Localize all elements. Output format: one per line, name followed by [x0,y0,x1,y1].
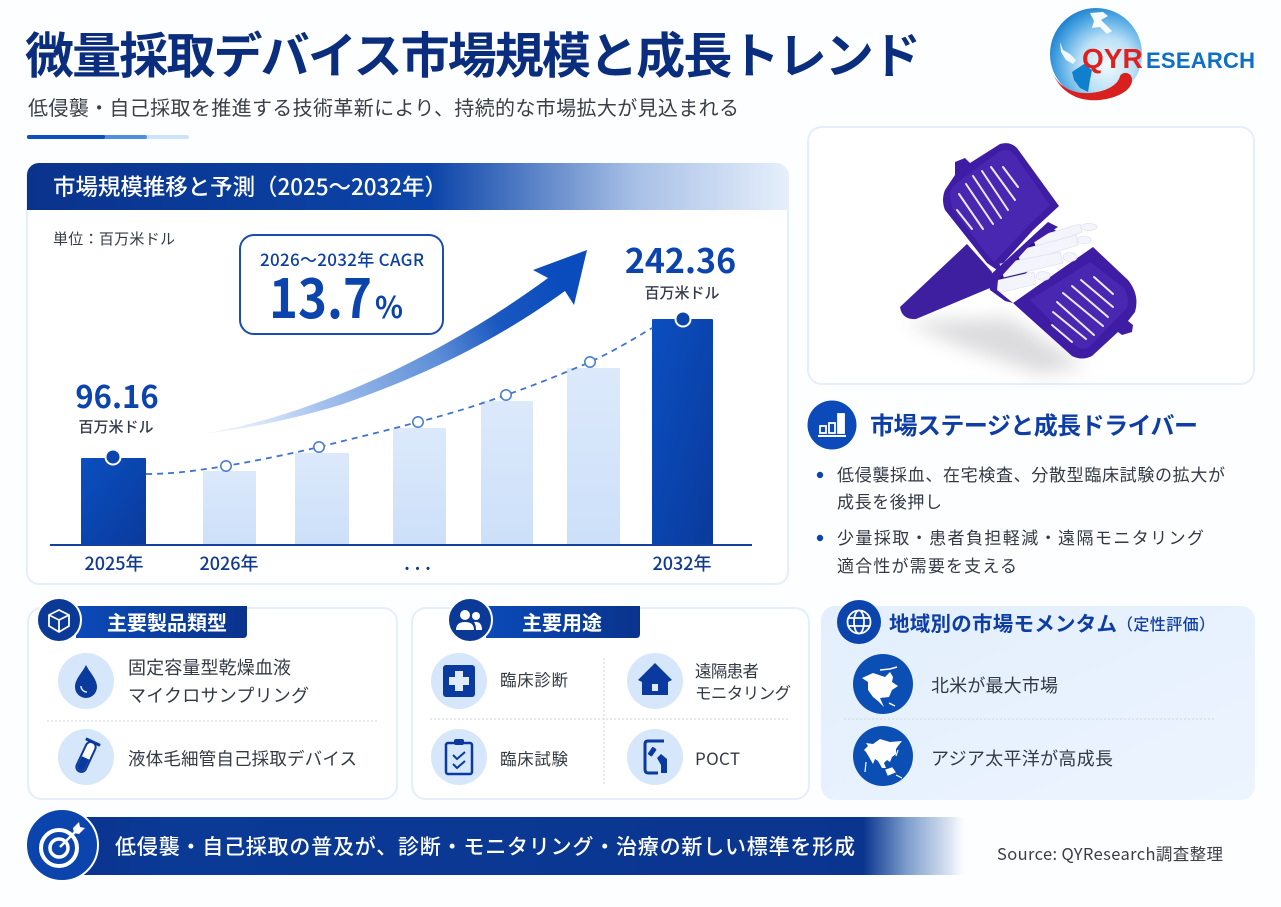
axis line [50,544,752,546]
axis labels: 2025年 [84,550,144,576]
growth arrow [202,250,587,434]
axis labels: 2026年 [199,550,259,576]
bar 2029 [481,401,533,545]
CAGR callout: 2026～2032年 CAGR [260,246,424,271]
item: clinical trials [431,729,568,785]
trend markers [106,312,690,471]
item: dried blood: マイクロサンプリング [128,682,309,708]
device lower lid [1013,247,1136,358]
CAGR callout [240,235,443,334]
logo: QYResearch [1050,8,1255,100]
bar chart [50,312,752,545]
item: dried blood: 固定容量型乾燥血液 [128,654,291,680]
title accent bar [27,135,189,139]
source note: Source: QYResearch調査整理 [997,841,1223,865]
subtitle: 低侵襲・自己採取を推進する技術革新により、持続的な市場拡大が見込まれる [28,92,739,121]
driver bullet 1 [817,461,1225,513]
device hinge [988,222,1058,303]
trend line [146,328,652,474]
driver bullet 2: 少量採取・患者負担軽減・遠隔モニタリング [837,524,1204,549]
icon: phone and tool [627,729,683,785]
panel: product types [28,598,397,799]
icon: bar chart [808,400,856,450]
CAGR callout: 13.7 [269,255,372,334]
icon: users [448,598,492,642]
logo wordmark [1082,43,1255,74]
bar 2028 [393,428,446,545]
icon: box [37,598,81,642]
item: clinical diagnosis: 臨床診断 [500,667,568,691]
icon: medical cross [431,653,487,709]
section: market stage and drivers [808,400,1225,577]
item: dried blood [58,653,309,709]
footer banner [26,809,970,881]
driver bullet 2: 適合性が需要を支える [837,552,1017,577]
icon: target [26,809,98,881]
regional heading: 地域別の市場モメンタム [889,607,1117,637]
item: POCT [627,729,740,785]
icon: clipboard [431,729,487,785]
item: Asia Pacific: アジア太平洋が高成長 [931,745,1113,771]
value 2025 [75,372,159,437]
regional heading [889,607,1215,637]
logo wordmark: QYR [1082,43,1143,74]
axis labels [84,550,712,576]
applications tab [486,606,640,638]
device inner gap [992,226,1058,290]
driver bullet 1: 低侵襲採血、在宅検査、分散型臨床試験の拡大が [837,461,1225,486]
chart header: 市場規模推移と予測（2025～2032年） [53,170,447,202]
icon: home [627,653,683,709]
applications tab: 主要用途 [522,607,602,636]
item: capillary device [58,729,357,785]
product shadow [905,318,1085,374]
icon: Asia map [853,726,913,786]
title: 微量採取デバイス市場規模と成長トレンド [25,17,921,88]
logo wordmark: ESEARCH [1146,48,1255,73]
icon: blood drop [58,653,114,709]
item: capillary device: 液体毛細管自己採取デバイス [128,746,357,771]
CAGR callout: % [375,283,403,327]
drivers heading: 市場ステージと成長ドライバー [870,406,1198,441]
bar 2025 [81,458,146,545]
panel: main applications [412,598,809,799]
panel: market size chart [27,163,788,584]
item: North America: 北米が最大市場 [931,672,1058,698]
axis labels: ... [404,550,436,575]
regional heading: （定性評価） [1117,611,1215,635]
footer banner: 低侵襲・自己採取の普及が、診断・モニタリング・治療の新しい標準を形成 [115,831,855,861]
item: clinical diagnosis [431,653,568,709]
value 2032: 242.36 [625,234,736,283]
panel: product image [808,127,1254,384]
item: North America [853,654,1058,714]
value 2025: 百万米ドル [78,416,154,437]
product types tab: 主要製品類型 [107,607,227,636]
item: remote monitoring: モニタリング [695,680,791,704]
product types tab [76,606,247,638]
item: remote monitoring [627,653,791,709]
axis labels: 2032年 [652,550,712,576]
bar 2026 [203,471,256,545]
logo swoosh [1053,73,1132,100]
logo globe [1050,8,1142,100]
driver bullet 1: 成長を後押し [837,488,942,513]
value 2025: 96.16 [75,372,159,417]
item: Asia Pacific [853,726,1113,786]
bar 2030 [567,368,620,545]
unit label: 単位：百万米ドル [53,228,175,249]
swabs [995,223,1097,293]
icon: test tube [58,729,114,785]
bar 2032 [652,319,713,545]
value 2032: 百万米ドル [644,282,720,303]
device slats [957,167,1113,342]
device wedge [900,244,992,319]
chart header [27,163,788,210]
panel: regional momentum [821,600,1255,800]
item: clinical trials: 臨床試験 [500,746,568,770]
bar 2027 [295,453,349,545]
driver bullet 2 [817,524,1204,577]
icon: North America map [853,654,913,714]
icon: globe [837,600,881,644]
item: POCT: POCT [695,745,740,770]
item: remote monitoring: 遠隔患者 [695,658,759,682]
device upper lid [943,143,1059,270]
